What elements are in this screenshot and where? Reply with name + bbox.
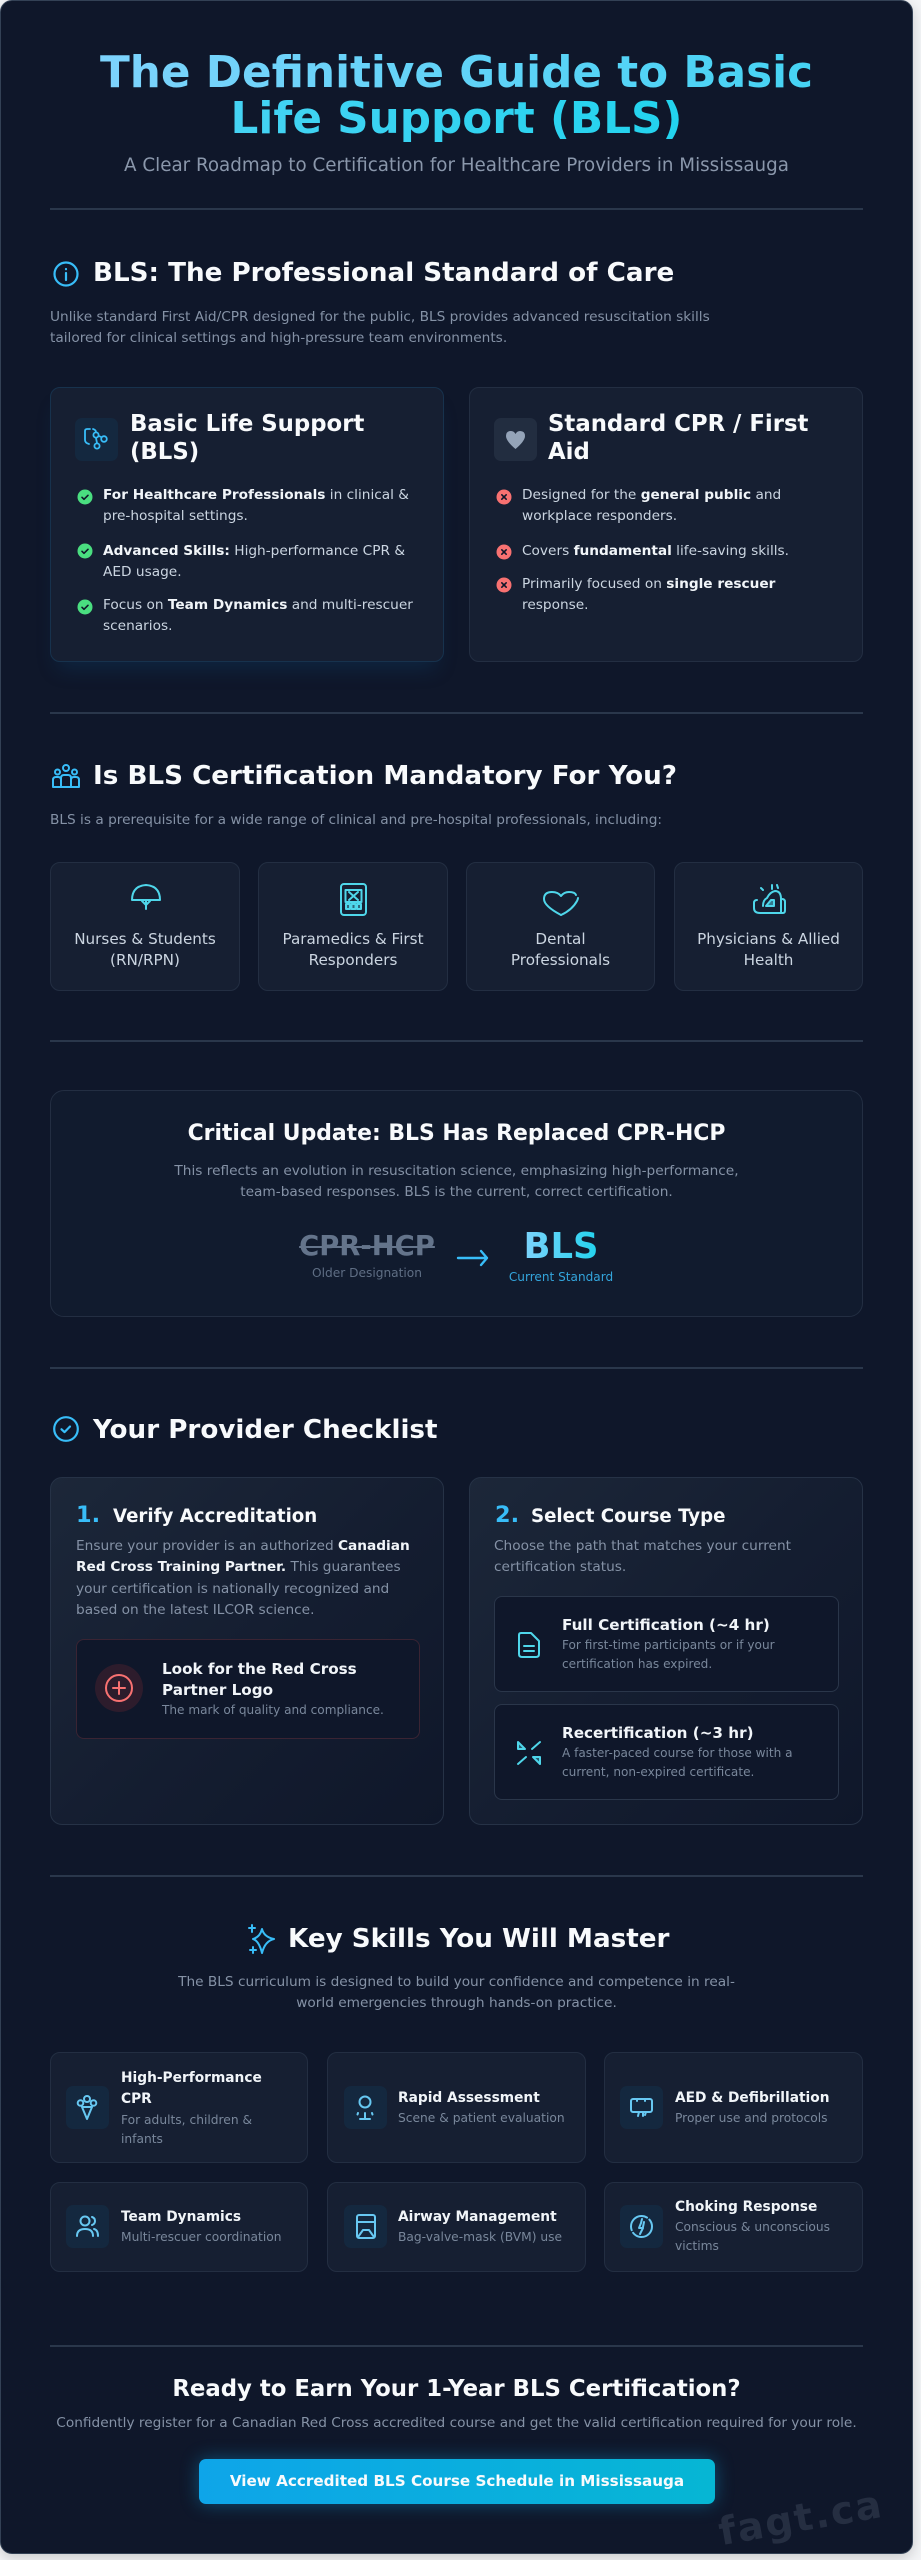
text: based on the latest ILCOR science. xyxy=(76,1602,314,1618)
option text: For first-time participants or if your xyxy=(562,1638,775,1652)
text: For adults, children & xyxy=(121,2113,252,2127)
title xyxy=(100,47,813,144)
section: skills heading xyxy=(245,1920,675,1957)
cta button xyxy=(199,2459,715,2504)
text xyxy=(76,1538,410,1618)
skills intro: world emergencies through hands-on practice. xyxy=(296,1995,617,2011)
icon: heart xyxy=(494,418,537,461)
icon: heart outline xyxy=(543,891,579,916)
skill: assessment xyxy=(327,2052,586,2163)
step number: 2. xyxy=(495,1502,519,1528)
icon: arrows inward xyxy=(517,1741,541,1765)
icon: sparkle xyxy=(248,1924,275,1954)
icon: check xyxy=(78,600,92,614)
section: professional standard xyxy=(50,258,710,346)
strikethrough name: CPR-HCP xyxy=(299,1231,435,1262)
heading: Is BLS Certification Mandatory For You? xyxy=(93,761,677,791)
title: CPR xyxy=(121,2091,152,2107)
panel: select course xyxy=(469,1477,863,1825)
option title: Recertification (~3 hr) xyxy=(562,1724,754,1742)
title: High-Performance xyxy=(121,2070,262,2086)
callout title: Look for the Red Cross xyxy=(162,1660,357,1678)
step title: Select Course Type xyxy=(531,1506,726,1527)
label: Professionals xyxy=(511,951,610,969)
option text: certification has expired. xyxy=(562,1656,712,1670)
text: team-based responses. BLS is the current, correct certification. xyxy=(240,1184,673,1200)
text: Conscious & unconscious xyxy=(675,2220,830,2234)
icon: arrow xyxy=(456,1250,488,1266)
list item: Focus on Team Dynamics and multi-rescuer xyxy=(103,597,413,613)
icon: monitor xyxy=(620,2086,663,2129)
list item xyxy=(103,543,405,580)
card title: Standard CPR / First xyxy=(548,411,808,437)
icon: cross xyxy=(496,578,512,592)
list item: Covers fundamental life-saving skills. xyxy=(522,543,789,559)
panel: standard cpr xyxy=(469,387,863,662)
card title xyxy=(548,411,808,465)
list item: pre-hospital settings. xyxy=(103,508,248,524)
icon: choking xyxy=(620,2205,663,2248)
icon: users xyxy=(66,2205,109,2248)
list item: Designed for the general public and xyxy=(522,487,781,503)
text: Choose the path that matches your current xyxy=(494,1538,791,1554)
cross list xyxy=(496,487,789,613)
title: Life Support (BLS) xyxy=(231,93,682,144)
list item: response. xyxy=(522,597,589,613)
label: Physicians & Allied xyxy=(697,930,840,948)
skill: aed xyxy=(604,2052,863,2163)
heading: Critical Update: BLS Has Replaced CPR-HCP xyxy=(188,1121,725,1146)
panel: basic life support xyxy=(50,387,444,662)
current standard xyxy=(509,1226,613,1284)
option title: Full Certification (~4 hr) xyxy=(562,1616,770,1634)
icon: hands xyxy=(753,884,786,914)
text: Proper use and protocols xyxy=(675,2111,828,2125)
icon: group xyxy=(52,764,80,788)
icon: cross xyxy=(496,490,512,504)
panel: verify accreditation xyxy=(50,1477,444,1825)
list item xyxy=(522,487,781,524)
title: Team Dynamics xyxy=(121,2209,241,2225)
icon: stethoscope xyxy=(75,418,118,461)
option text xyxy=(562,1744,793,1781)
text: This reflects an evolution in resuscitation science, emphasizing high-performance, xyxy=(174,1163,739,1179)
title: Rapid Assessment xyxy=(398,2090,540,2106)
label: Responders xyxy=(309,951,397,969)
title xyxy=(121,2068,262,2110)
option text: current, non-expired certificate. xyxy=(562,1764,754,1778)
icon: plus circle xyxy=(95,1664,143,1712)
title: Choking Response xyxy=(675,2199,817,2215)
title: AED & Defibrillation xyxy=(675,2090,830,2106)
text: Ensure your provider is an authorized Canadian xyxy=(76,1538,410,1554)
heading: Your Provider Checklist xyxy=(93,1415,438,1445)
text xyxy=(494,1538,791,1575)
list item: workplace responders. xyxy=(522,508,677,524)
big name: BLS xyxy=(523,1226,598,1267)
step number: 1. xyxy=(76,1502,100,1528)
skill: choking xyxy=(604,2182,863,2272)
panel: dental xyxy=(466,862,655,991)
list item xyxy=(103,487,409,524)
list item xyxy=(103,597,413,634)
label xyxy=(697,930,840,969)
list item: For Healthcare Professionals in clinical & xyxy=(103,487,409,503)
intro text: tailored for clinical settings and high-pressure team environments. xyxy=(50,330,507,346)
text xyxy=(174,1163,739,1200)
option text xyxy=(562,1636,775,1673)
label: Older Designation xyxy=(312,1266,422,1280)
label xyxy=(511,930,610,969)
skills intro: The BLS curriculum is designed to build your confidence and competence in real- xyxy=(178,1974,735,1990)
callout sub: The mark of quality and compliance. xyxy=(162,1703,384,1717)
card title: (BLS) xyxy=(130,439,199,465)
skill: airway xyxy=(327,2182,586,2272)
red cross callout xyxy=(76,1639,420,1739)
label: Health xyxy=(744,951,793,969)
text: Red Cross Training Partner. This guarantees xyxy=(76,1559,401,1575)
icon: mask xyxy=(344,2205,387,2248)
text: Multi-rescuer coordination xyxy=(121,2230,281,2244)
text: victims xyxy=(675,2238,719,2252)
panel: paramedics xyxy=(258,862,448,991)
text: Bag-valve-mask (BVM) use xyxy=(398,2230,562,2244)
intro text xyxy=(50,309,710,346)
label xyxy=(74,930,216,969)
icon: document xyxy=(518,1632,540,1658)
icon: ambulance device xyxy=(340,883,367,916)
icon: nurse xyxy=(131,884,161,910)
label: (RN/RPN) xyxy=(110,951,180,969)
card title: Basic Life Support xyxy=(130,411,364,437)
label xyxy=(282,930,424,969)
option: recert xyxy=(494,1704,839,1800)
option: full xyxy=(494,1596,839,1692)
list item: scenarios. xyxy=(103,618,172,634)
intro text: Unlike standard First Aid/CPR designed for the public, BLS provides advanced resuscitation skills xyxy=(50,309,710,325)
text: your certification is nationally recognized and xyxy=(76,1581,389,1597)
section: mandatory xyxy=(50,761,677,828)
step title: Verify Accreditation xyxy=(113,1506,317,1527)
icon: info circle xyxy=(53,261,79,287)
watermark: fagt.ca xyxy=(715,2482,887,2555)
card title xyxy=(130,411,364,465)
list item: AED usage. xyxy=(103,564,182,580)
list item: Primarily focused on single rescuer xyxy=(522,576,775,592)
subtitle: A Clear Roadmap to Certification for Healthcare Providers in Mississauga xyxy=(124,155,789,176)
heading: Key Skills You Will Master xyxy=(288,1924,669,1954)
text xyxy=(121,2111,252,2148)
icon: check xyxy=(78,544,92,558)
heading: BLS: The Professional Standard of Care xyxy=(93,258,674,288)
label: Current Standard xyxy=(509,1270,613,1284)
text: infants xyxy=(121,2132,163,2146)
skills intro xyxy=(50,1972,863,2015)
icon: person xyxy=(344,2086,387,2129)
list item: Advanced Skills: High-performance CPR & xyxy=(103,543,405,559)
icon: check xyxy=(78,490,92,504)
text: certification status. xyxy=(494,1559,626,1575)
check list xyxy=(78,487,413,634)
section: checklist heading xyxy=(53,1415,438,1445)
title: Airway Management xyxy=(398,2209,557,2225)
label: Paramedics & First xyxy=(282,930,424,948)
skill: cpr xyxy=(50,2052,308,2163)
text: Scene & patient evaluation xyxy=(398,2111,565,2125)
title: The Definitive Guide to Basic xyxy=(100,47,813,98)
option text: A faster-paced course for those with a xyxy=(562,1746,793,1760)
icon: cross xyxy=(496,544,512,560)
old designation xyxy=(299,1231,435,1280)
cta heading: Ready to Earn Your 1-Year BLS Certification? xyxy=(172,2376,741,2402)
panel: nurses xyxy=(50,862,240,991)
card title: Aid xyxy=(548,439,590,465)
label: Nurses & Students xyxy=(74,930,216,948)
skill: team xyxy=(50,2182,308,2272)
icon: circle check xyxy=(53,1416,79,1442)
list item xyxy=(522,576,776,613)
intro text: BLS is a prerequisite for a wide range of clinical and pre-hospital professionals, including: xyxy=(50,812,662,828)
cta button: View Accredited BLS Course Schedule in Mississauga xyxy=(230,2472,684,2490)
panel: physicians xyxy=(674,862,863,991)
cta text: Confidently register for a Canadian Red Cross accredited course and get the valid certification required for your role. xyxy=(56,2415,857,2431)
callout title: Partner Logo xyxy=(162,1681,273,1699)
panel: critical update xyxy=(50,1090,863,1317)
text xyxy=(675,2218,830,2255)
icon: cpr xyxy=(66,2086,109,2129)
label: Dental xyxy=(535,930,586,948)
callout title xyxy=(162,1660,357,1699)
